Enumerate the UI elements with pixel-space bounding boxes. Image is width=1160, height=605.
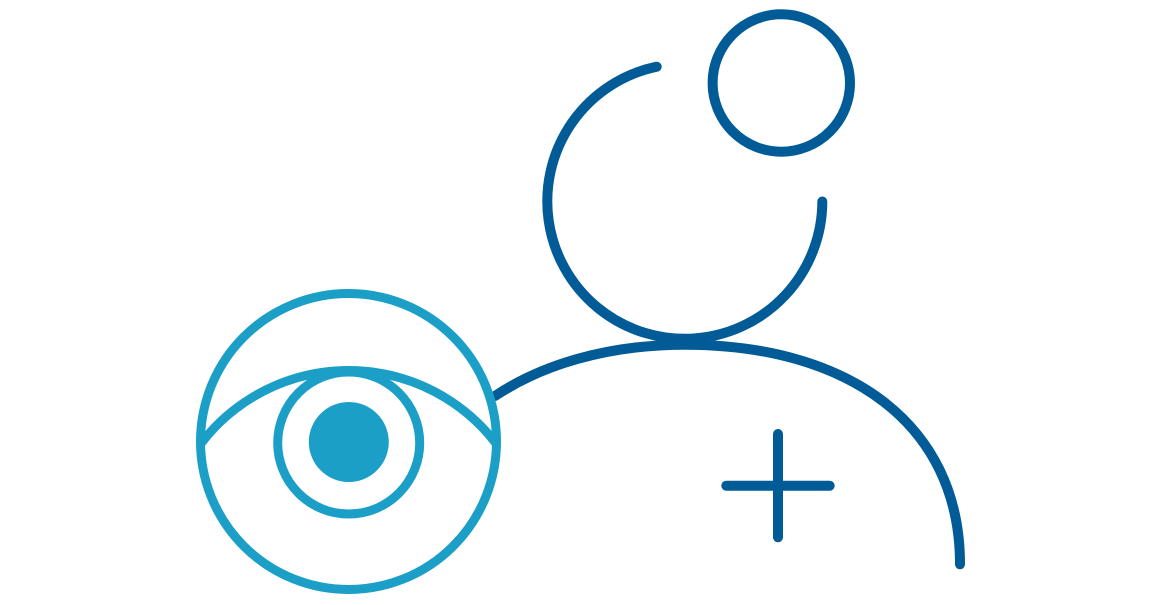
- icon: medical plus: [726, 434, 830, 537]
- illustration: person with eye and plus: [196, 9, 965, 594]
- icon: magnified eye: [190, 294, 507, 590]
- icon: person head arc: [547, 67, 822, 339]
- icon: small circle: [713, 14, 850, 152]
- icon: pupil: [309, 402, 389, 482]
- icon: lens circle: [200, 294, 496, 590]
- icon: eye outline: [205, 366, 492, 446]
- icon: iris ring: [278, 372, 420, 514]
- icon: person shoulders: [495, 345, 960, 564]
- icon: person figure: [495, 14, 960, 564]
